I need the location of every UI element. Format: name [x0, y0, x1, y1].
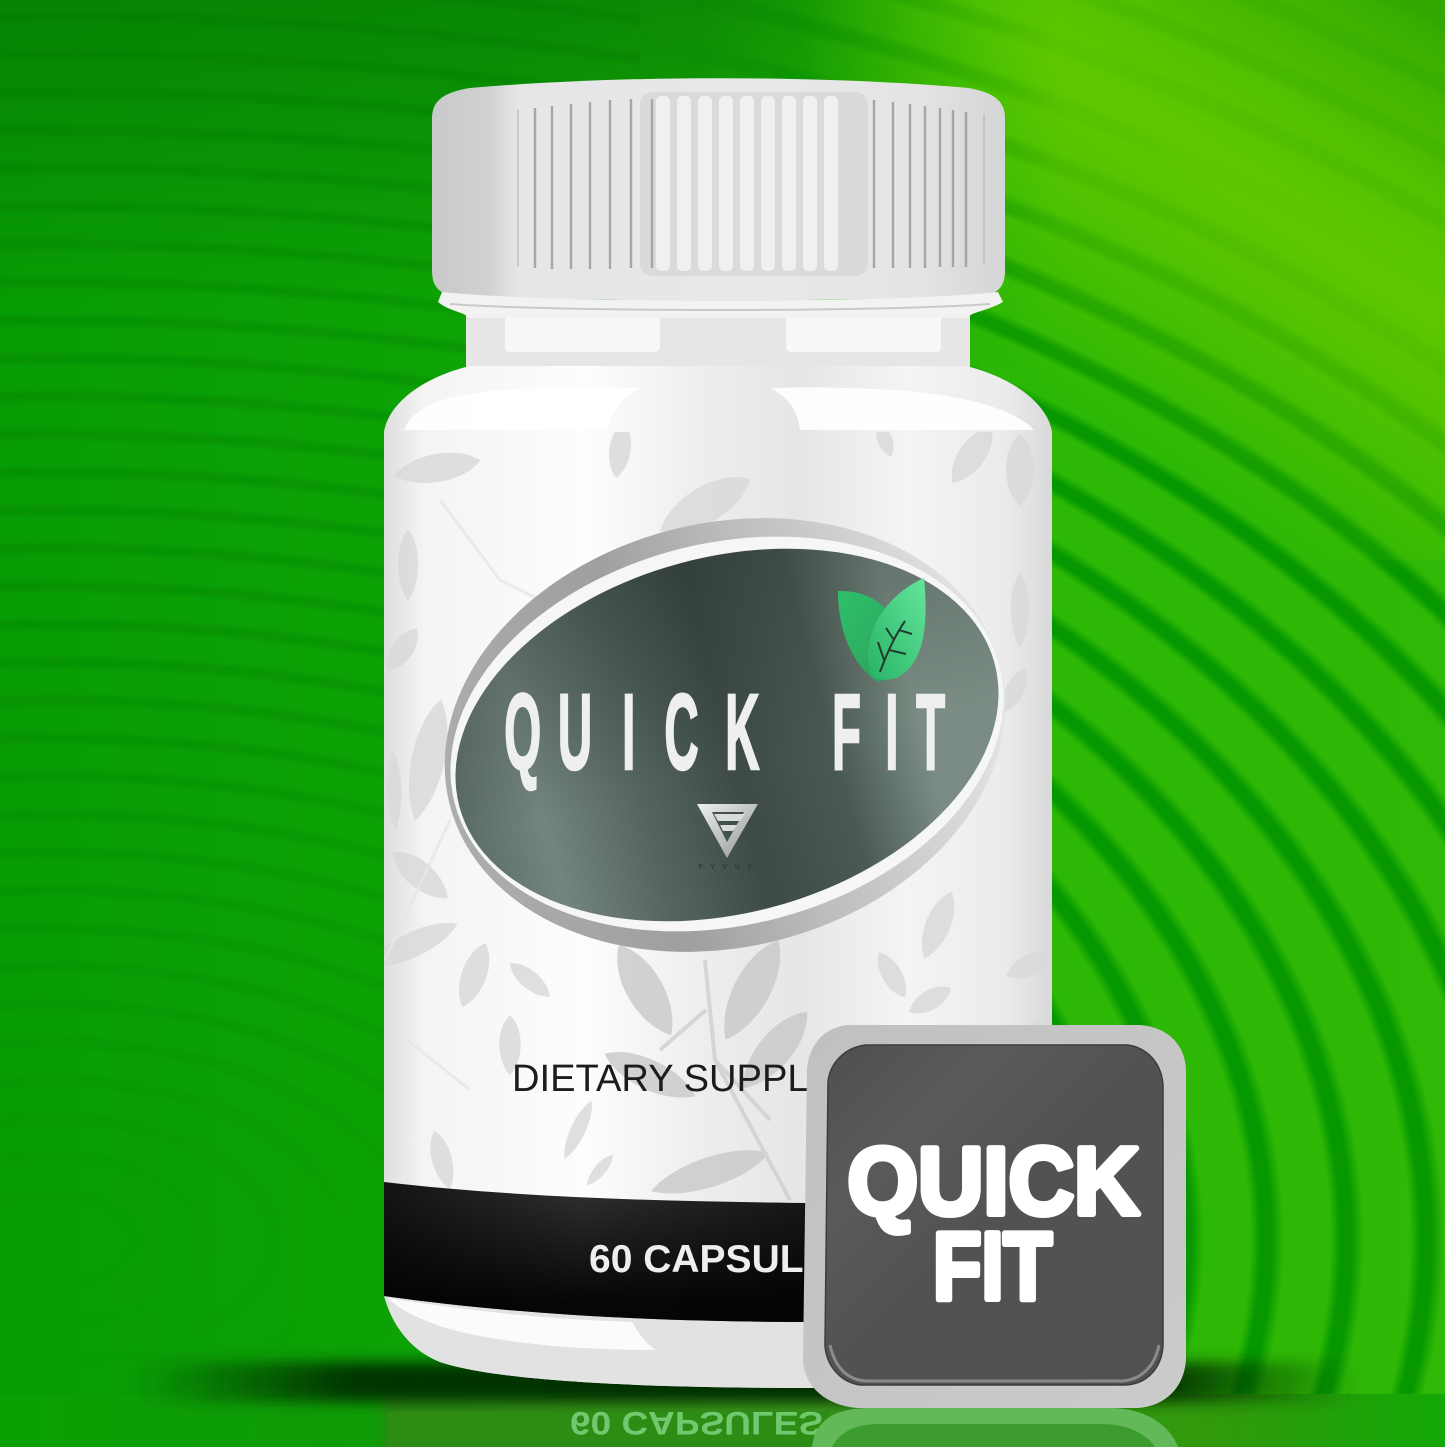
dietary supplement text: DIETARY SUPPLEMENT	[512, 1058, 942, 1100]
brand logo	[697, 804, 759, 871]
black band	[384, 1182, 820, 1322]
bottle reflection	[388, 1405, 830, 1447]
label leaf pattern	[361, 420, 1058, 1205]
app badge	[803, 1025, 1186, 1408]
floor reflection	[0, 1394, 1445, 1447]
badge text	[848, 1128, 1140, 1320]
capsule count: 60 CAPSULES	[589, 1238, 856, 1281]
brand logo: FYVUS	[699, 864, 759, 871]
bottle reflection: 60 CAPSULES	[570, 1405, 823, 1441]
cap grip panel	[640, 92, 868, 276]
oval label	[398, 461, 1052, 1009]
cap ridges	[535, 99, 966, 269]
icon: green leaves	[838, 578, 926, 682]
bottle base shading	[386, 1296, 820, 1388]
cap lower ring	[438, 292, 1003, 318]
badge inner panel	[825, 1045, 1163, 1385]
bottle body	[384, 366, 1052, 1388]
product name: QUICK FIT	[504, 671, 945, 792]
bottle cap	[432, 78, 1005, 318]
bottle neck	[466, 300, 970, 372]
badge text: FIT	[933, 1213, 1052, 1320]
bottle	[361, 300, 1058, 1388]
ground shadow	[130, 1362, 1360, 1402]
badge text: QUICK	[848, 1128, 1140, 1235]
badge reflection	[812, 1408, 1178, 1447]
